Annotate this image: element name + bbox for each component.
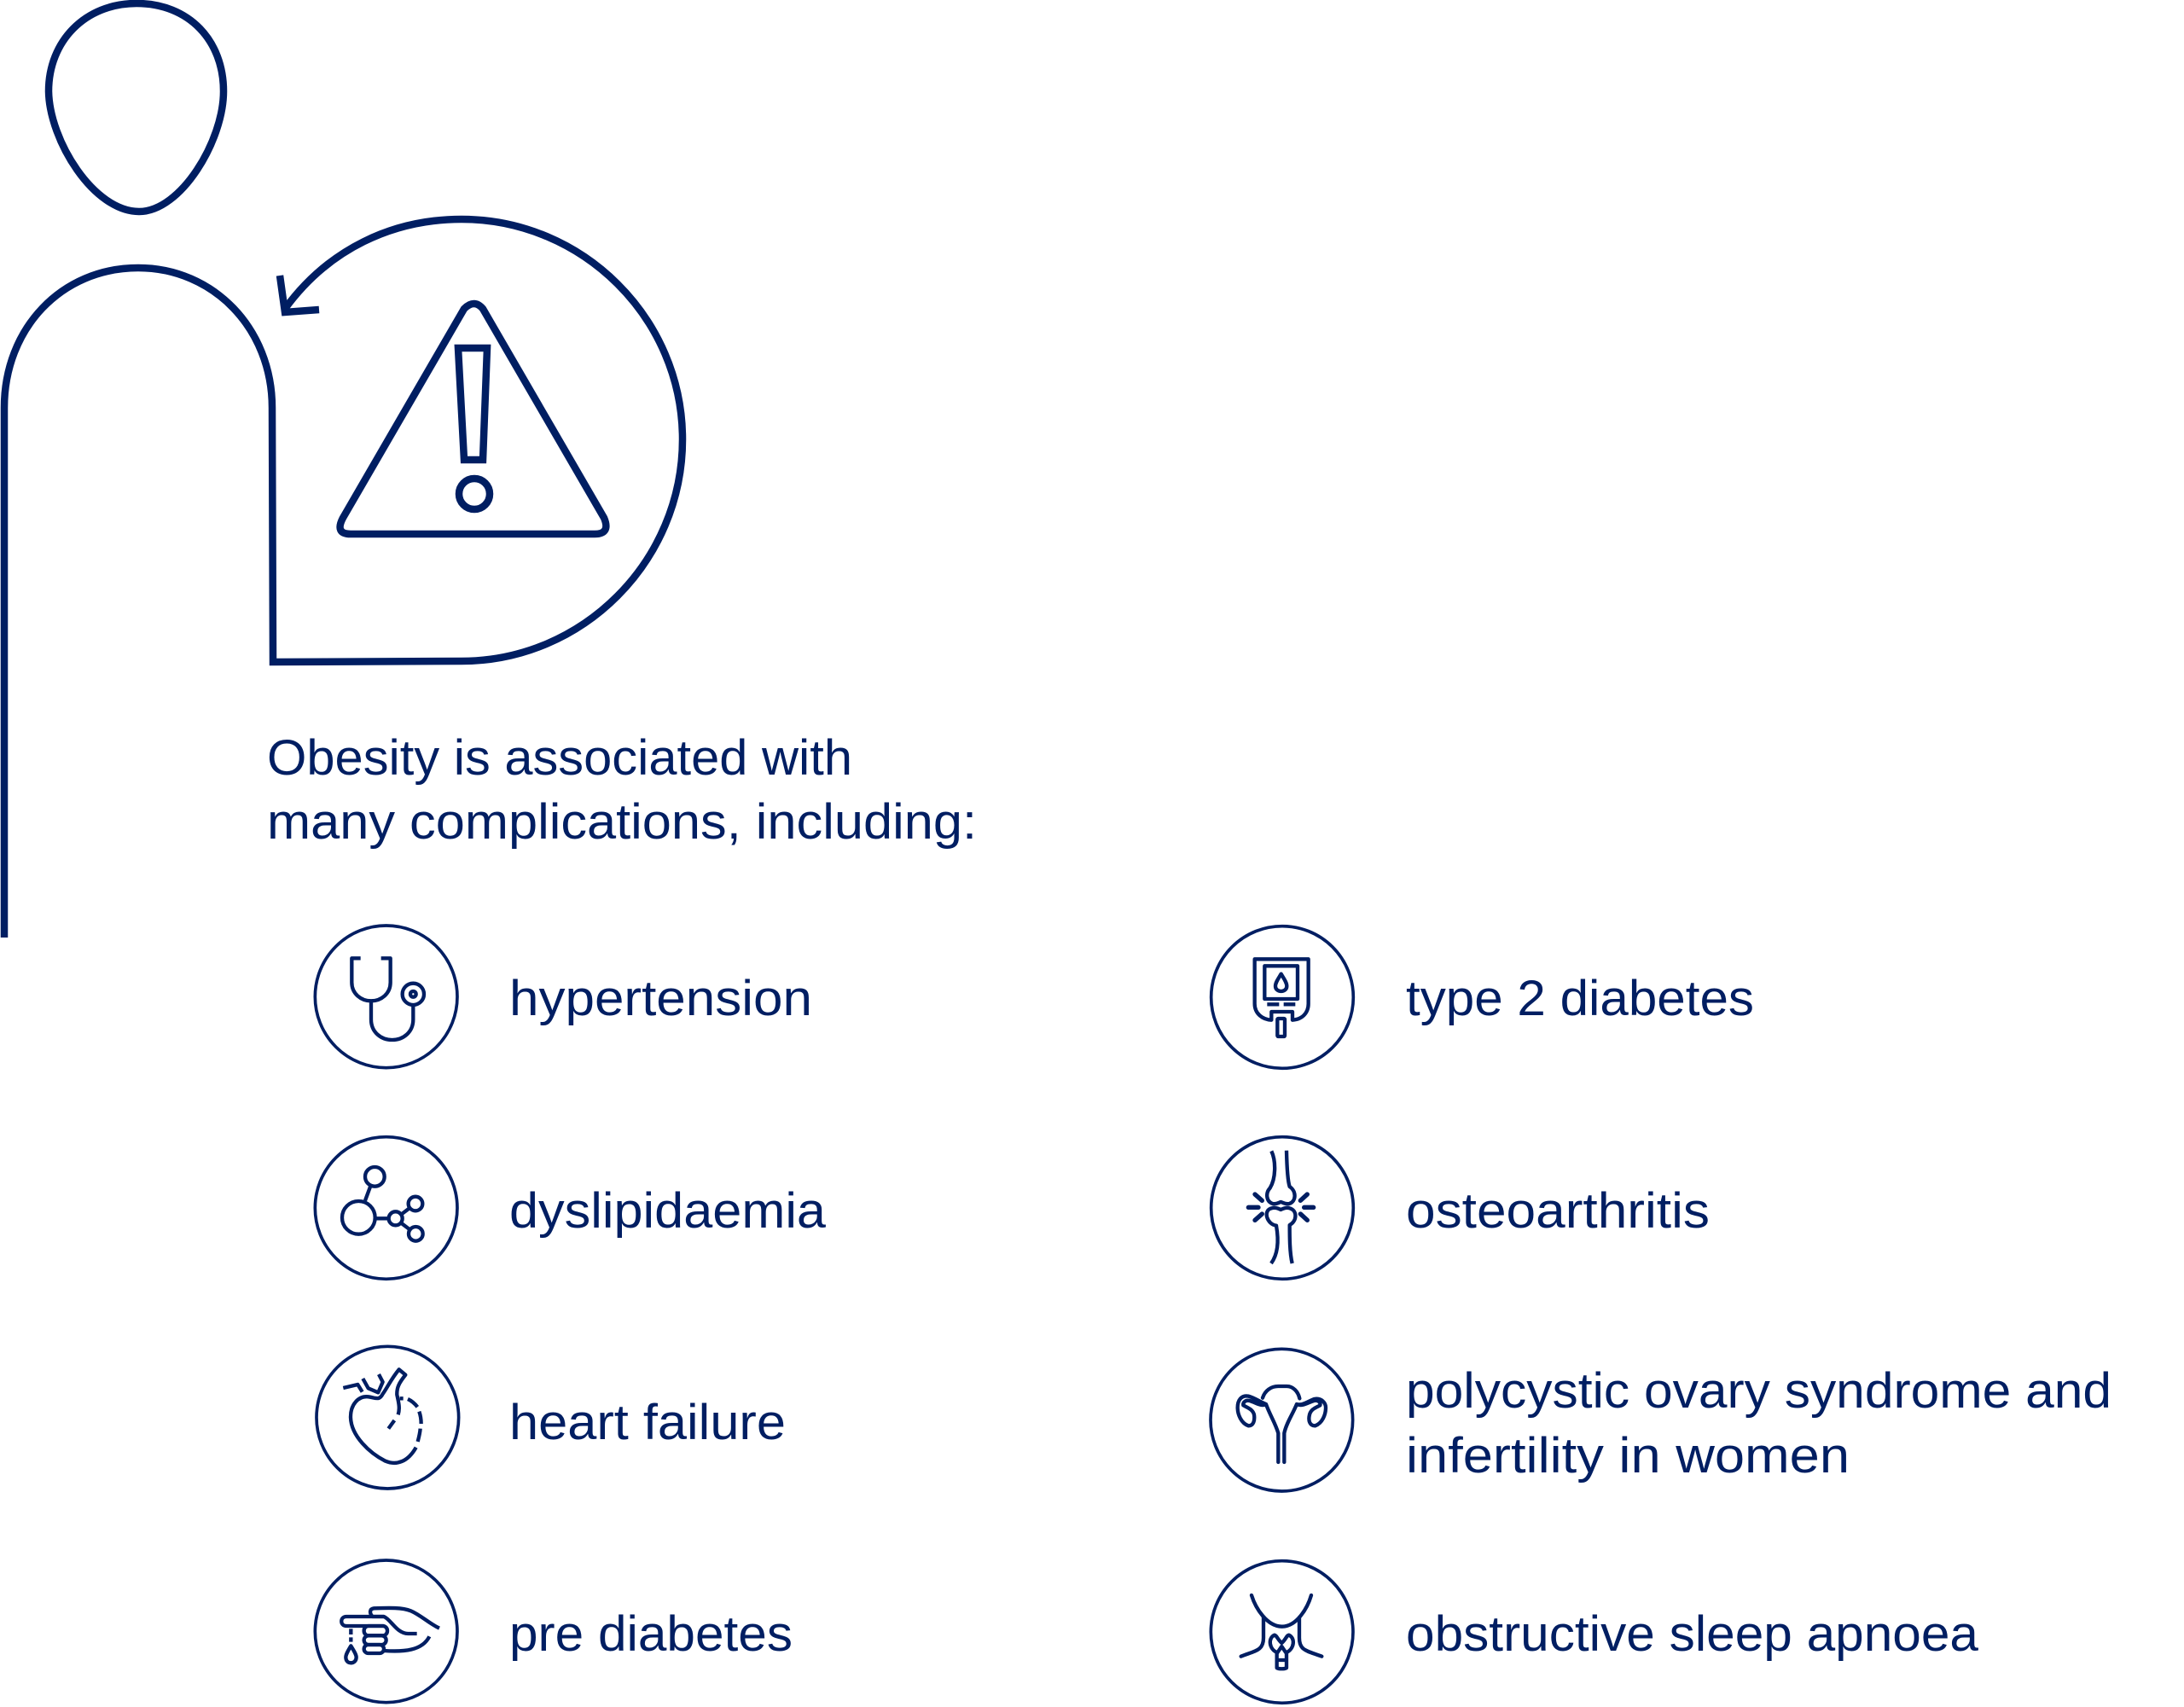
label: hypertension: hypertension <box>509 971 812 1026</box>
label: obstructive sleep apnoea: obstructive sleep apnoea <box>1406 1606 1979 1662</box>
label: polycystic ovary syndrome and infertility in women: polycystic ovary syndrome and <box>1406 1363 2111 1419</box>
label: heart failure: heart failure <box>509 1395 786 1450</box>
icon: knee joint <box>1211 1137 1353 1279</box>
arrow head <box>280 276 319 312</box>
icon: glucose meter <box>1211 926 1353 1068</box>
label: polycystic ovary syndrome and infertility in women: infertility in women <box>1406 1428 1850 1483</box>
label: pre diabetes: pre diabetes <box>509 1606 793 1662</box>
icon: molecule <box>315 1137 457 1279</box>
icon: finger prick <box>315 1560 457 1703</box>
exclamation mark <box>458 348 487 460</box>
exclamation dot <box>459 479 490 509</box>
icon: heart <box>317 1346 459 1489</box>
label: osteoarthritis: osteoarthritis <box>1406 1183 1710 1239</box>
icon: stethoscope <box>315 926 457 1068</box>
icon: uterus and ovaries <box>1211 1349 1353 1491</box>
intro text <box>267 730 977 850</box>
label: dyslipidaemia: dyslipidaemia <box>509 1183 827 1239</box>
icon: neck and thyroid <box>1211 1561 1353 1703</box>
person body and speech arrow outline <box>4 219 682 938</box>
label: polycystic ovary syndrome and infertility in women <box>1406 1363 2111 1483</box>
warning triangle <box>340 304 606 534</box>
person head <box>49 3 224 212</box>
intro text: many complications, including: <box>267 794 977 850</box>
label: type 2 diabetes: type 2 diabetes <box>1406 971 1754 1026</box>
intro text: Obesity is associated with <box>267 730 852 786</box>
icon: person with warning speech bubble <box>4 3 682 938</box>
